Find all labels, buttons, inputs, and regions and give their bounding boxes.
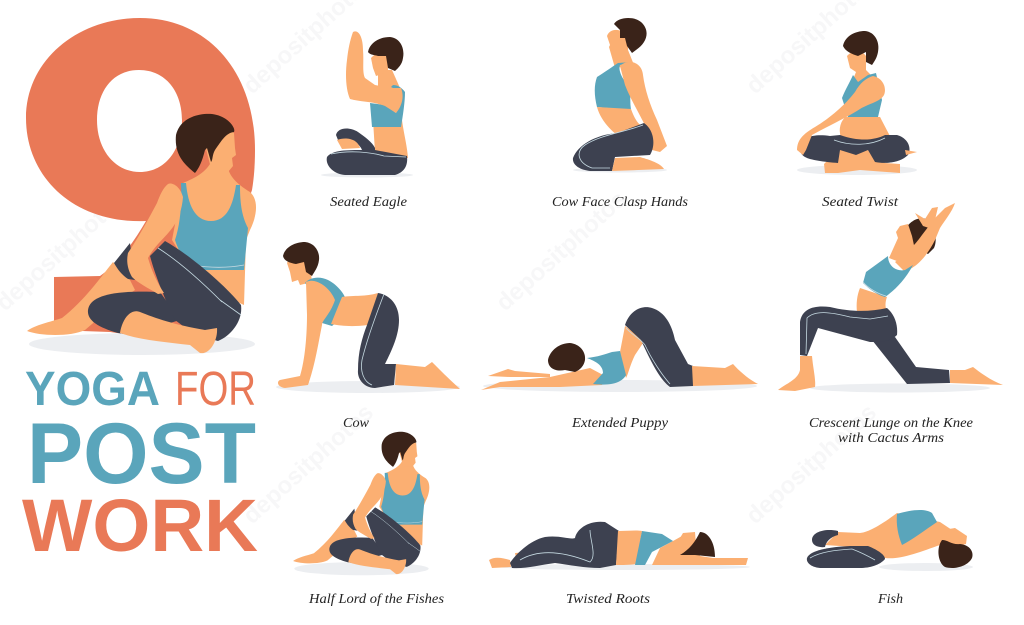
label: seated eagle: Seated Eagle bbox=[330, 194, 407, 209]
watermark bbox=[0, 0, 882, 529]
raised shin and foot bbox=[27, 262, 135, 335]
tucked shin and foot bbox=[120, 311, 217, 353]
pose: fish bbox=[807, 510, 973, 571]
label: extended puppy: Extended Puppy bbox=[571, 415, 668, 430]
face bbox=[205, 131, 236, 172]
watermark: depositphotos bbox=[238, 399, 379, 529]
twisted arm bbox=[127, 184, 183, 294]
title: for: FOR bbox=[175, 363, 256, 416]
pose: cow bbox=[276, 242, 460, 393]
pose: half lord of the fishes bbox=[293, 432, 429, 575]
label: twisted roots: Twisted Roots bbox=[566, 591, 650, 606]
pose labels bbox=[308, 194, 973, 606]
pose: seated twist bbox=[797, 31, 917, 175]
big number 9 bbox=[26, 18, 255, 345]
label: cow: Cow bbox=[343, 415, 369, 430]
title: yoga: YOGA bbox=[25, 363, 160, 416]
label: half lord of the fishes: Half Lord of the Fishes bbox=[308, 591, 444, 606]
folded leg pants bbox=[88, 292, 180, 335]
hair bbox=[176, 114, 234, 173]
label: cow face clasp hands: Cow Face Clasp Hands bbox=[552, 194, 688, 209]
label: fish: Fish bbox=[877, 591, 903, 606]
title bbox=[22, 363, 258, 567]
pose: seated eagle bbox=[321, 31, 413, 178]
label: with cactus arms: with Cactus Arms bbox=[838, 430, 944, 445]
pose: crescent lunge on the knee with cactus arms bbox=[778, 203, 1003, 392]
watermark: depositphotos bbox=[741, 399, 882, 529]
label: crescent lunge on the knee: Crescent Lunge on the Knee bbox=[809, 415, 973, 430]
tank top bbox=[175, 183, 248, 270]
floor shadow bbox=[29, 333, 255, 355]
raised leg pants at knee bbox=[114, 243, 135, 280]
main figure: half lord of the fishes bbox=[27, 114, 256, 355]
title: work: WORK bbox=[22, 484, 258, 567]
title: post: POST bbox=[27, 406, 256, 502]
pose: extended puppy bbox=[481, 307, 758, 392]
raised thigh pants bbox=[150, 241, 241, 341]
pose: cow face clasp hands bbox=[573, 18, 667, 172]
pose: twisted roots bbox=[489, 522, 750, 570]
watermark: depositphotos bbox=[491, 186, 632, 316]
label: seated twist: Seated Twist bbox=[822, 194, 899, 209]
back and neck bbox=[172, 160, 256, 305]
